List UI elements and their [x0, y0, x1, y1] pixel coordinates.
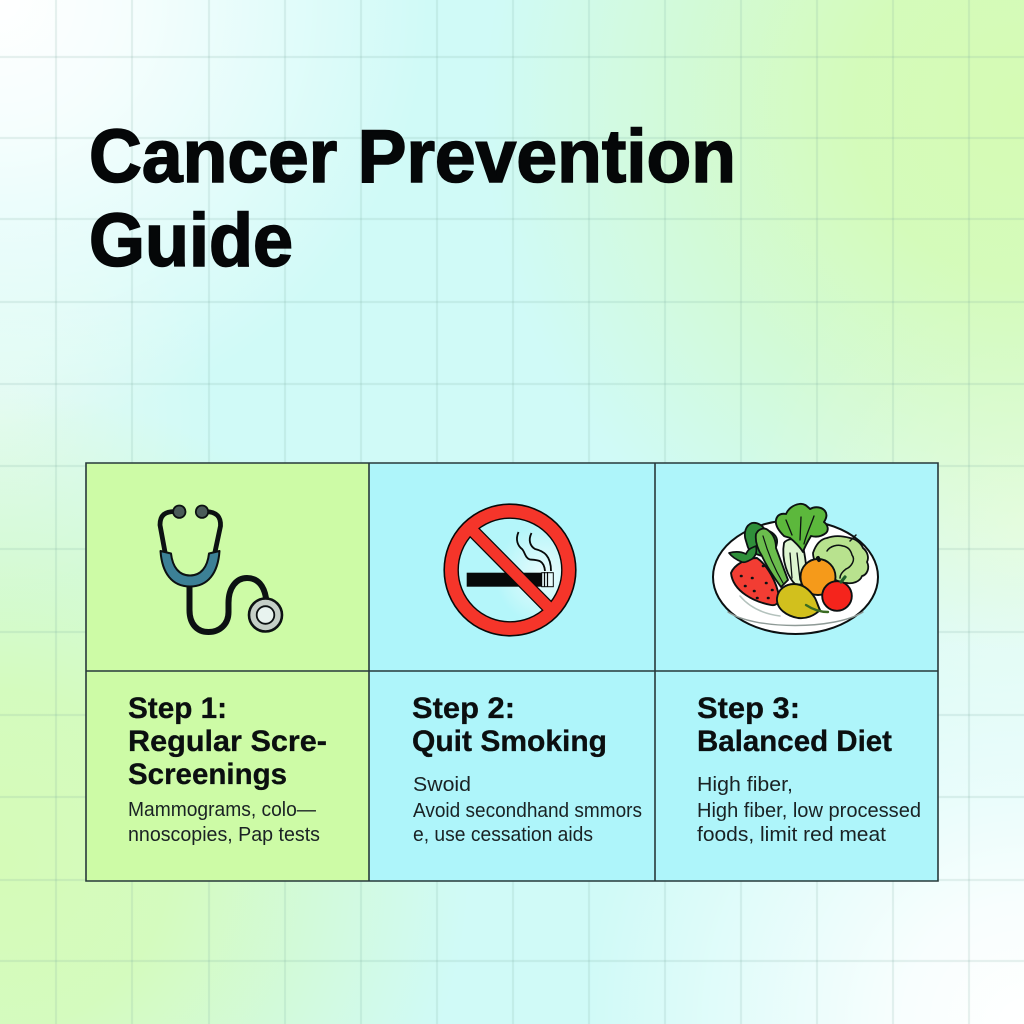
- body: step 2: Avoid secondhand smmors: [413, 800, 642, 822]
- plate: [713, 520, 878, 634]
- tomato stem: [841, 577, 845, 582]
- heading: step 2: Quit Smoking: [412, 725, 607, 758]
- green stalk: [756, 529, 788, 587]
- body: step 3: High fiber, low processed: [697, 800, 921, 822]
- heading: step 1: Step 1:: [128, 692, 227, 725]
- cabbage inner leaf: [827, 535, 856, 578]
- heading: step 1: Regular Scre-: [128, 725, 327, 758]
- heading: step 2: [412, 692, 607, 758]
- panel: steps table: [86, 463, 938, 881]
- icon: no smoking sign: [444, 504, 576, 636]
- stalk vein: [763, 536, 783, 583]
- heading: step 1: Screenings: [128, 758, 287, 791]
- lettuce and stalk veins: [786, 516, 814, 580]
- body: step 2: Swoid: [413, 774, 471, 796]
- tomato: [822, 581, 852, 611]
- title: Cancer Prevention: [89, 114, 736, 198]
- strawberry seeds: [741, 566, 772, 598]
- body: step 3: [697, 774, 921, 846]
- orange stem: [818, 558, 819, 560]
- heading: step 3: Step 3:: [697, 692, 800, 725]
- lemon stem: [806, 605, 828, 612]
- lemon: [777, 584, 820, 618]
- icon: plate of vegetables: [713, 504, 878, 634]
- body: step 3: High fiber,: [697, 774, 793, 796]
- table border and dividers: [86, 463, 938, 881]
- panel: step 1 background: [86, 463, 369, 881]
- body: step 2: [413, 774, 642, 846]
- text: step 2: [412, 692, 642, 846]
- body: step 1: [128, 799, 320, 846]
- body: step 1: nnoscopies, Pap tests: [128, 824, 320, 846]
- cabbage: [813, 536, 868, 583]
- title: Guide: [89, 198, 293, 282]
- lettuce leaves: [776, 504, 828, 552]
- panel: step 2 background: [369, 463, 655, 881]
- body: step 1: Mammograms, colo—: [128, 799, 316, 821]
- body: step 2: e, use cessation aids: [413, 824, 593, 846]
- strawberry sepals: [729, 546, 756, 562]
- heading: step 1: [128, 692, 327, 791]
- text: step 3: [697, 692, 921, 846]
- icon: stethoscope: [160, 506, 282, 632]
- heading: step 3: [697, 692, 892, 758]
- heading: step 3: Balanced Diet: [697, 725, 892, 758]
- panel: step 3 background: [655, 463, 938, 881]
- orange: [800, 559, 836, 595]
- title: [89, 114, 736, 282]
- heading: step 2: Step 2:: [412, 692, 515, 725]
- bok choy stalk: [783, 539, 806, 585]
- strawberry: [731, 558, 779, 605]
- back greens: [745, 523, 777, 556]
- text: step 1: [128, 692, 327, 846]
- body: step 3: foods, limit red meat: [697, 824, 886, 846]
